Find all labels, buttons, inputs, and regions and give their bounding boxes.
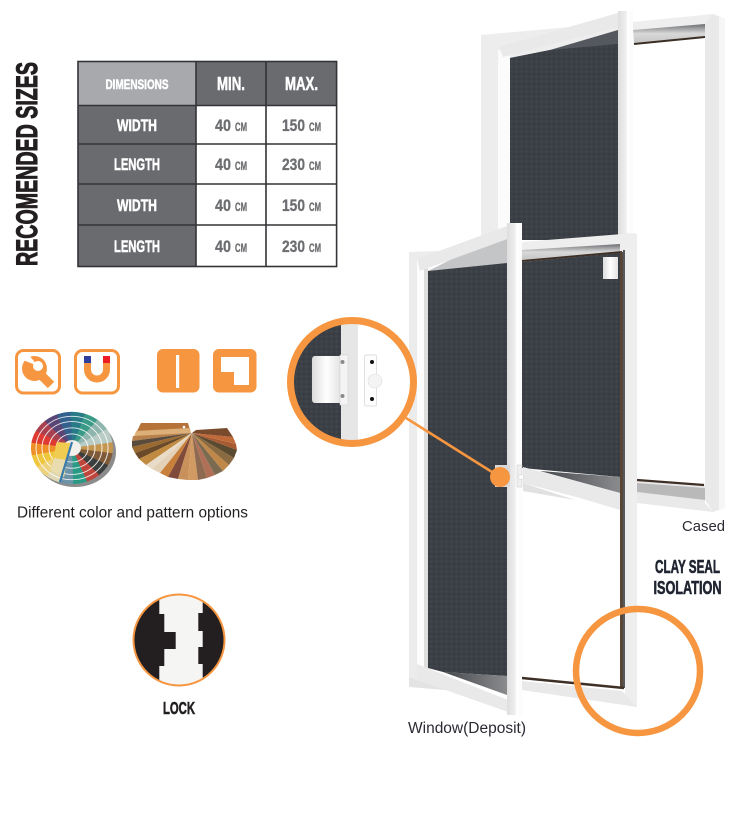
table: dimensions: MIN. <box>217 73 245 94</box>
icon: magnet <box>76 350 118 393</box>
table: dimensions: MAX. <box>285 73 318 94</box>
table: dimensions: 150 <box>282 197 305 215</box>
table: dimensions: WIDTH <box>117 117 157 135</box>
table: dimensions: 230 <box>282 238 305 256</box>
color palette fan <box>34 416 116 487</box>
heading: clay seal isolation: CLAY SEAL <box>655 556 720 577</box>
table: dimensions: 40 <box>215 156 231 174</box>
callout dot <box>490 467 510 487</box>
cased window frame <box>481 11 725 512</box>
heading: clay seal isolation: ISOLATION <box>654 577 722 598</box>
table: dimensions: WIDTH <box>117 197 157 215</box>
magnifier ring: clay seal <box>576 609 700 733</box>
table: dimensions: 40 <box>215 238 231 256</box>
label: cased: Cased <box>682 518 725 535</box>
table: dimensions: CM <box>309 202 321 214</box>
table: dimensions: LENGTH <box>114 238 160 256</box>
table: dimensions: CM <box>309 161 321 173</box>
table: dimensions: CM <box>235 161 247 173</box>
heading: clay seal isolation <box>654 556 722 598</box>
callout line to hinge <box>406 418 492 472</box>
table: dimensions <box>78 61 337 267</box>
caption: color and pattern options: Different color and pattern options <box>17 504 248 522</box>
table: dimensions: DIMENSIONS <box>106 76 168 92</box>
label: window deposit: Window(Deposit) <box>408 720 526 737</box>
table: dimensions: 150 <box>282 117 305 135</box>
icon: wrench <box>16 350 60 393</box>
table: dimensions: CM <box>309 122 321 134</box>
table: dimensions: 230 <box>282 156 305 174</box>
window deposit frame with open door <box>409 223 637 715</box>
table: dimensions: CM <box>235 243 247 255</box>
latch on frame <box>603 257 618 279</box>
table: dimensions: CM <box>235 202 247 214</box>
table: dimensions: LENGTH <box>114 156 160 174</box>
icon: corner profile <box>213 349 256 392</box>
table: dimensions: CM <box>309 243 321 255</box>
table: dimensions: 40 <box>215 117 231 135</box>
lock profile icon <box>132 594 226 686</box>
table: dimensions: 40 <box>215 197 231 215</box>
open door reflection <box>540 471 620 493</box>
table: dimensions: CM <box>235 122 247 134</box>
wood pattern fan <box>132 423 237 480</box>
label: lock: LOCK <box>163 698 195 718</box>
magnifier: hinge detail <box>285 315 420 450</box>
icon: straight profile <box>157 349 200 392</box>
